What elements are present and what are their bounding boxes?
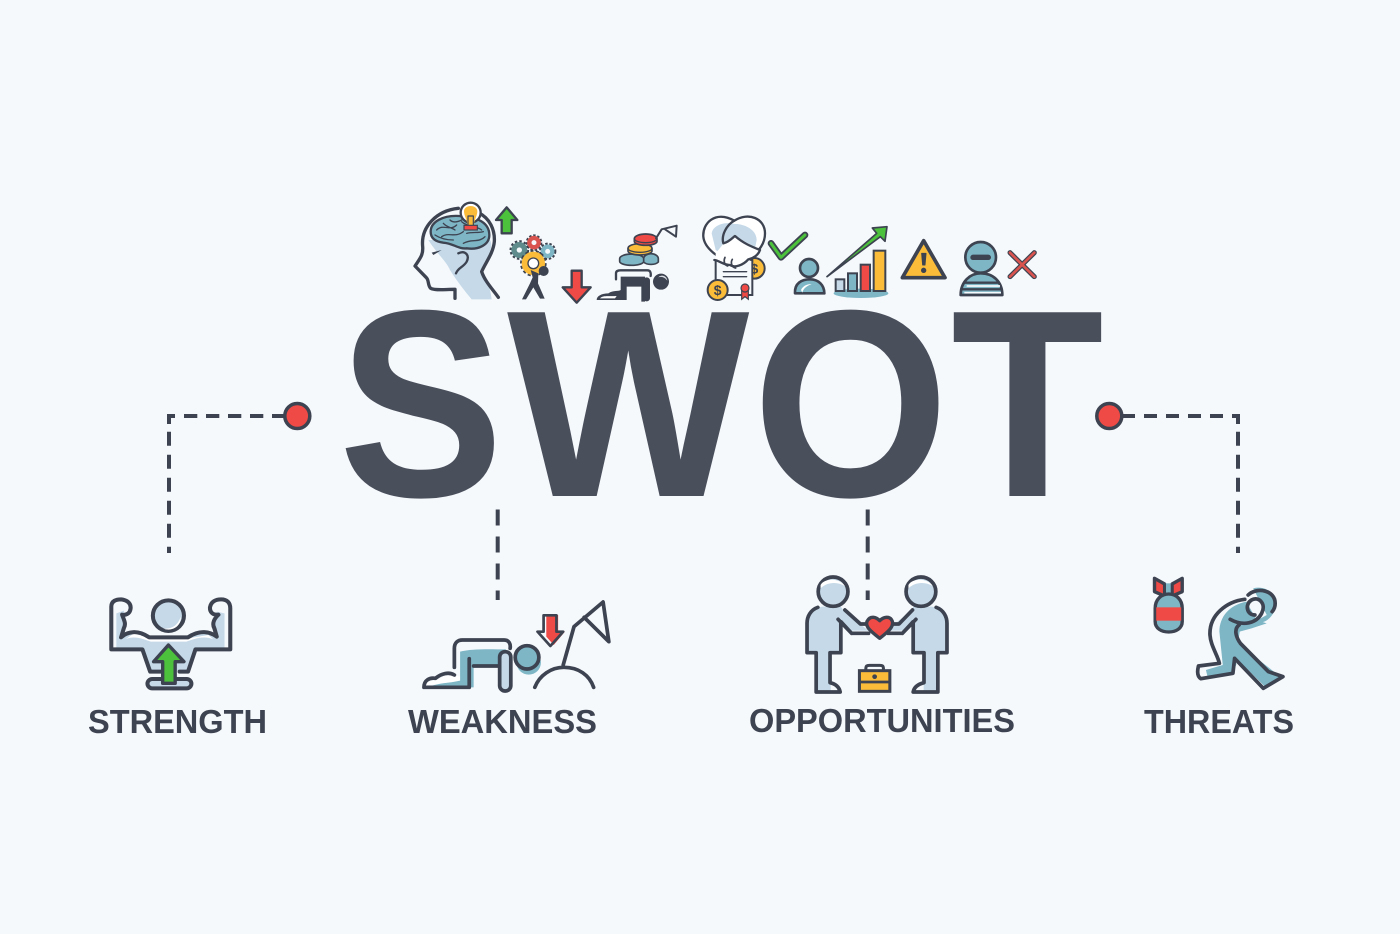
icon: masked burglar [961, 242, 1002, 295]
top icons left group [415, 203, 677, 303]
title: SWOT: S [338, 254, 504, 553]
title: SWOT: T [951, 255, 1104, 553]
icon: handshake and contract: $ [714, 282, 722, 298]
label: weakness: WEAKNESS [408, 703, 597, 740]
icon: green check mark [771, 235, 805, 257]
connector: weakness [496, 510, 500, 600]
connector: opportunities [866, 510, 870, 600]
label: strength: STRENGTH [88, 703, 267, 740]
icon: coins with flag [620, 226, 677, 265]
icon: handshake and contract: $ [750, 260, 758, 276]
top icons right group [703, 217, 1034, 300]
connector: strength [169, 404, 310, 553]
title: SWOT: W [507, 254, 752, 553]
icon: heart [867, 617, 893, 638]
group: bottom right icons [807, 577, 1283, 692]
group: bottom left icons [111, 599, 609, 691]
icon: opportunities partners with heart [807, 577, 947, 692]
icon: green up arrow [496, 207, 517, 233]
icon: weakness crawling figure with flag [424, 602, 609, 691]
icon: head with brain [415, 203, 498, 299]
icon: bomb [1155, 578, 1182, 632]
icon: handshake and contract [703, 217, 765, 300]
icon: growth bar chart [827, 227, 888, 298]
icon: strength bodybuilder [111, 599, 230, 688]
icon: person carrying gears [511, 236, 555, 299]
title: SWOT [338, 254, 1104, 554]
icon: cowering figure [1198, 588, 1283, 688]
icon: briefcase [859, 665, 890, 691]
label: opportunities: OPPORTUNITIES [749, 702, 1015, 739]
icon: warning triangle [902, 241, 945, 278]
icon: red down arrow [563, 271, 591, 303]
label: threats: THREATS [1144, 703, 1294, 740]
icon: red cross [1010, 253, 1034, 277]
title: SWOT: O [752, 256, 949, 554]
icon: light bulb [461, 203, 481, 230]
icon: person [795, 259, 824, 293]
connector: threats [1097, 404, 1238, 553]
icon: crawling figure [597, 270, 669, 302]
